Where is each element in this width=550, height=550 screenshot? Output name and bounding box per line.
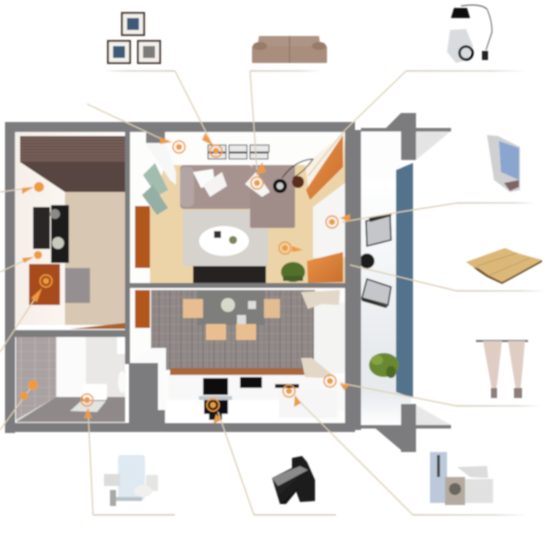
window: [313, 183, 350, 258]
second cooktop: [240, 377, 262, 388]
balcony round table: [360, 254, 374, 268]
orange markers: [20, 133, 350, 424]
product: lamps: [447, 5, 492, 63]
lower curtain: [307, 252, 343, 283]
product: window profile: [487, 135, 520, 192]
upper curtain: [306, 135, 343, 200]
dark wood wall: [20, 136, 125, 192]
walls: [5, 113, 451, 452]
sofa: [180, 165, 295, 228]
shelves: [142, 163, 168, 215]
rug: [183, 210, 268, 266]
kitchen: [130, 288, 350, 423]
tv unit: [193, 266, 266, 283]
toilet and basin: [70, 371, 126, 412]
hallway rug: [65, 268, 90, 303]
hob: [275, 384, 299, 388]
dining table and chairs: [183, 290, 280, 340]
product: picture frames: [108, 13, 160, 63]
balcony plant: [369, 353, 399, 378]
kitchen window: [314, 303, 350, 373]
product: bathroom fixtures: [104, 455, 158, 506]
coffee table: [199, 226, 249, 256]
product: cooker hood: [272, 456, 315, 504]
floor lamp: [273, 159, 313, 193]
balcony: [360, 131, 451, 426]
worktop: [166, 368, 345, 423]
balcony glazing: [396, 163, 413, 398]
left room: [15, 132, 125, 330]
floor plant: [281, 262, 305, 282]
living room: [130, 132, 350, 283]
bathroom: [16, 337, 126, 423]
balcony chair lower: [361, 279, 391, 308]
product: appliances: [430, 452, 493, 505]
kitchen curtains: [301, 290, 340, 378]
shower: [57, 337, 86, 397]
kitchen door: [135, 290, 150, 328]
hallway door: [29, 264, 60, 305]
door: [135, 206, 150, 268]
console and mirror: [33, 205, 69, 263]
product: curtains: [476, 340, 528, 398]
product: wood planks: [466, 248, 542, 284]
wall pictures: [208, 145, 269, 159]
balcony chair upper: [366, 213, 392, 246]
product: sofa: [252, 36, 327, 63]
cooktop and oven: [199, 378, 232, 420]
